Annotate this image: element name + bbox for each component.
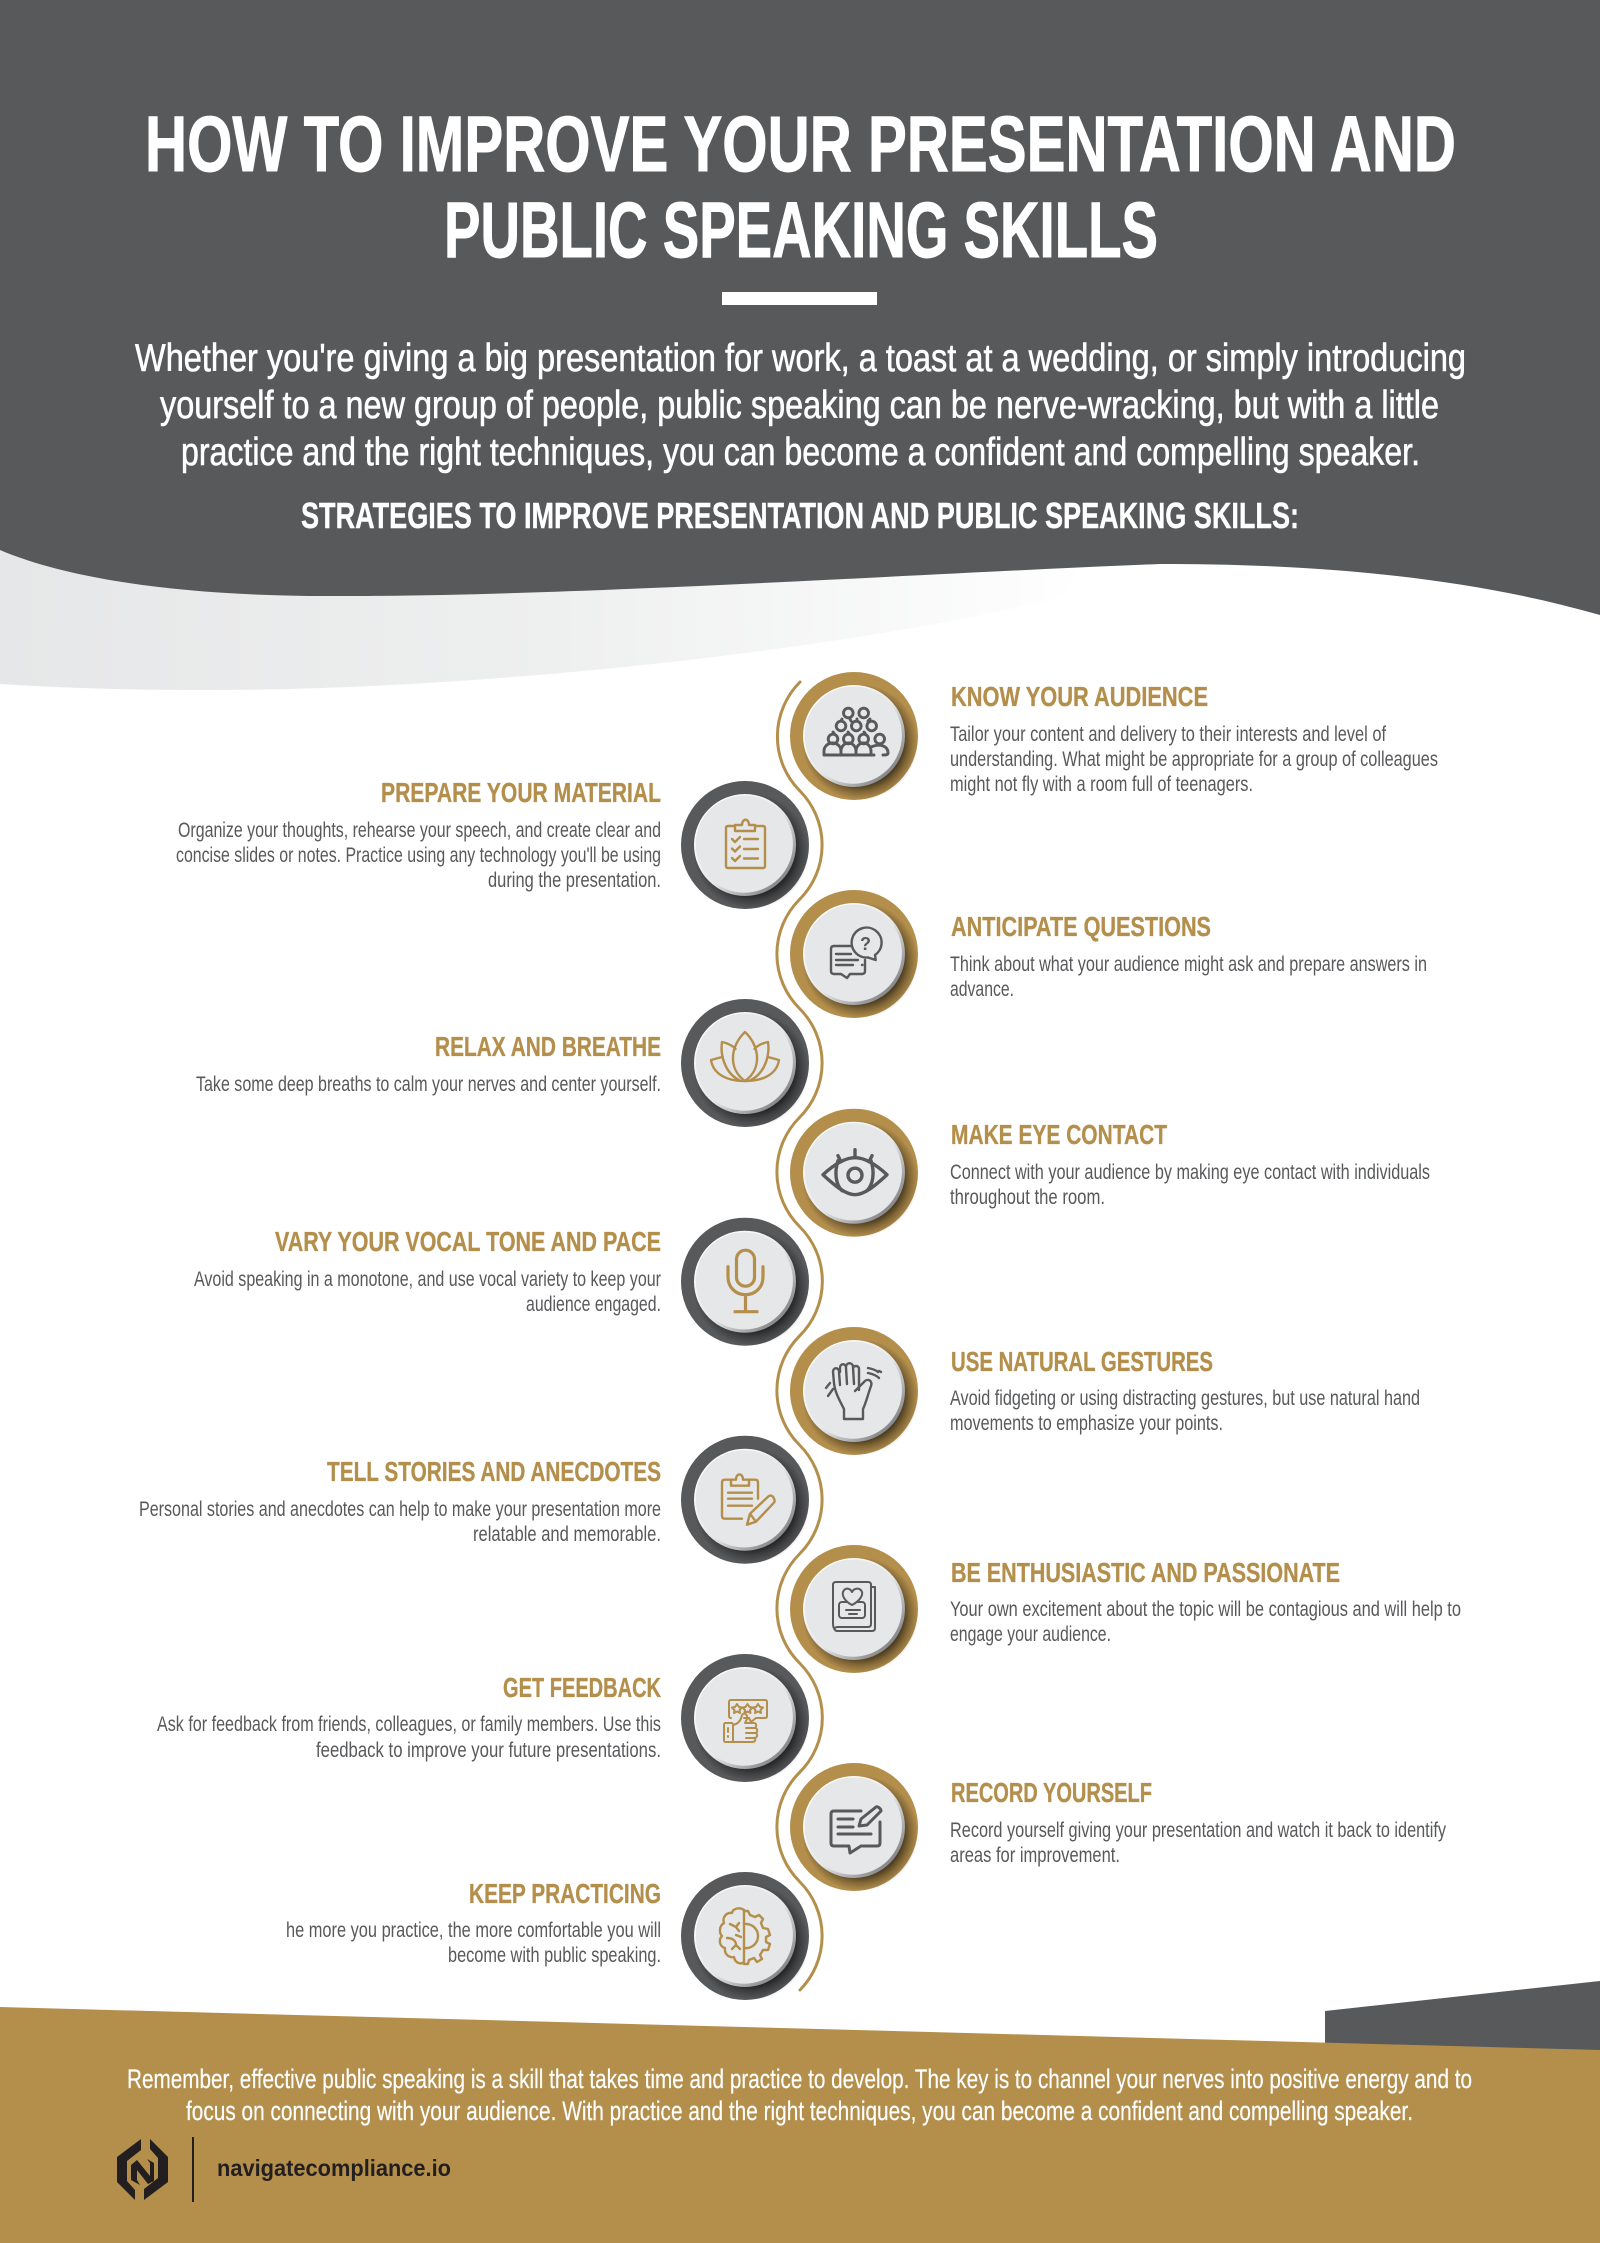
body text: Personal stories and anecdotes can help to make your presentation more bbox=[139, 1498, 661, 1521]
body text: feedback to improve your future presentations. bbox=[316, 1739, 661, 1762]
icon: lotus bbox=[681, 999, 809, 1127]
body text: Think about what your audience might ask and prepare answers in bbox=[950, 953, 1427, 976]
body text: Avoid speaking in a monotone, and use vocal variety to keep your bbox=[194, 1268, 661, 1291]
icon: question speech bubbles: ? bbox=[860, 934, 871, 954]
body text: during the presentation. bbox=[488, 869, 661, 892]
heading: BE ENTHUSIASTIC AND PASSIONATE bbox=[951, 1557, 1340, 1588]
step: relax and breathe bbox=[196, 999, 809, 1127]
footer text bbox=[127, 2064, 1472, 2126]
body text: audience engaged. bbox=[526, 1293, 661, 1316]
body text: relatable and memorable. bbox=[473, 1523, 661, 1546]
body text bbox=[950, 723, 1438, 796]
body text bbox=[139, 1498, 661, 1546]
icon: star rating and thumbs up bbox=[681, 1654, 809, 1782]
heading: ANTICIPATE QUESTIONS bbox=[951, 911, 1211, 942]
body text: throughout the room. bbox=[950, 1186, 1105, 1209]
heading: TELL STORIES AND ANECDOTES bbox=[327, 1456, 661, 1487]
heading: PREPARE YOUR MATERIAL bbox=[381, 777, 661, 808]
body text bbox=[950, 1161, 1430, 1209]
body text: Connect with your audience by making eye contact with individuals bbox=[950, 1161, 1430, 1184]
icon: raised hand bbox=[790, 1327, 918, 1455]
logo bbox=[117, 2137, 451, 2202]
step: anticipate questions bbox=[790, 890, 1427, 1018]
step: be enthusiastic and passionate bbox=[790, 1545, 1461, 1673]
body text bbox=[176, 819, 661, 892]
icon: book with heart bbox=[790, 1545, 918, 1673]
intro paragraph bbox=[135, 337, 1466, 474]
body text: movements to emphasize your points. bbox=[950, 1412, 1223, 1435]
body text bbox=[950, 1598, 1461, 1646]
heading: RECORD YOURSELF bbox=[951, 1777, 1152, 1808]
footer panel bbox=[0, 2007, 1600, 2243]
heading: KEEP PRACTICING bbox=[469, 1878, 661, 1909]
heading: KNOW YOUR AUDIENCE bbox=[951, 681, 1208, 712]
body text: Organize your thoughts, rehearse your speech, and create clear and bbox=[178, 819, 661, 842]
body text: Your own excitement about the topic will be contagious and will help to bbox=[950, 1598, 1461, 1621]
step: know your audience bbox=[790, 672, 1438, 800]
step: make eye contact bbox=[790, 1109, 1430, 1237]
icon: microphone bbox=[681, 1218, 809, 1346]
logo mark bbox=[117, 2139, 168, 2200]
body text: advance. bbox=[950, 978, 1014, 1001]
body text: Ask for feedback from friends, colleagues, or family members. Use this bbox=[157, 1713, 661, 1736]
body text: Record yourself giving your presentation and watch it back to identify bbox=[950, 1819, 1446, 1842]
body text bbox=[950, 1819, 1446, 1867]
footer dark accent bbox=[1325, 1981, 1600, 2052]
heading: USE NATURAL GESTURES bbox=[951, 1346, 1213, 1377]
title bbox=[145, 99, 1456, 274]
icon: eye bbox=[790, 1109, 918, 1237]
body text: Tailor your content and delivery to their interests and level of bbox=[950, 723, 1386, 746]
icon: question speech bubbles bbox=[790, 890, 918, 1018]
body text bbox=[157, 1713, 661, 1762]
body text: engage your audience. bbox=[950, 1623, 1111, 1646]
step: vary your vocal tone and pace bbox=[194, 1218, 809, 1346]
heading: MAKE EYE CONTACT bbox=[951, 1119, 1167, 1150]
body text bbox=[950, 1387, 1420, 1435]
section heading: STRATEGIES TO IMPROVE PRESENTATION AND PUBLIC SPEAKING SKILLS: bbox=[301, 495, 1299, 536]
body text bbox=[286, 1919, 661, 1967]
logo divider bbox=[192, 2137, 194, 2202]
body text: become with public speaking. bbox=[448, 1944, 661, 1967]
icon: notes and pencil bbox=[681, 1436, 809, 1564]
step: record yourself bbox=[790, 1763, 1446, 1891]
icon: audience bbox=[790, 672, 918, 800]
title: PUBLIC SPEAKING SKILLS bbox=[444, 185, 1158, 274]
body text: might not fly with a room full of teenagers. bbox=[950, 773, 1253, 796]
icon: clipboard checklist bbox=[681, 781, 809, 909]
serpentine connector bbox=[777, 682, 822, 1990]
body text: he more you practice, the more comfortable you will bbox=[286, 1919, 661, 1942]
body text: understanding. What might be appropriate for a group of colleagues bbox=[950, 748, 1438, 771]
heading: GET FEEDBACK bbox=[503, 1672, 661, 1703]
step: use natural gestures bbox=[790, 1327, 1420, 1455]
step: tell stories and anecdotes bbox=[139, 1436, 809, 1564]
body text: concise slides or notes. Practice using any technology you'll be using bbox=[176, 844, 661, 867]
body text: Take some deep breaths to calm your nerves and center yourself. bbox=[196, 1073, 661, 1096]
body text: areas for improvement. bbox=[950, 1844, 1120, 1867]
icon: message with pencil bbox=[790, 1763, 918, 1891]
heading: RELAX AND BREATHE bbox=[435, 1031, 661, 1062]
title underline bar bbox=[722, 292, 877, 305]
logo wordmark: navigatecompliance.io bbox=[217, 2155, 451, 2181]
header panel bbox=[0, 0, 1600, 615]
light grey wave bbox=[0, 540, 1100, 690]
body text bbox=[194, 1268, 661, 1316]
step: keep practicing bbox=[286, 1872, 809, 2000]
step: get feedback bbox=[157, 1654, 809, 1782]
body text bbox=[950, 953, 1427, 1001]
body text: Avoid fidgeting or using distracting gestures, but use natural hand bbox=[950, 1387, 1420, 1410]
icon: brain and gear bbox=[681, 1872, 809, 2000]
heading: VARY YOUR VOCAL TONE AND PACE bbox=[275, 1226, 661, 1257]
step: prepare your material bbox=[176, 777, 809, 909]
